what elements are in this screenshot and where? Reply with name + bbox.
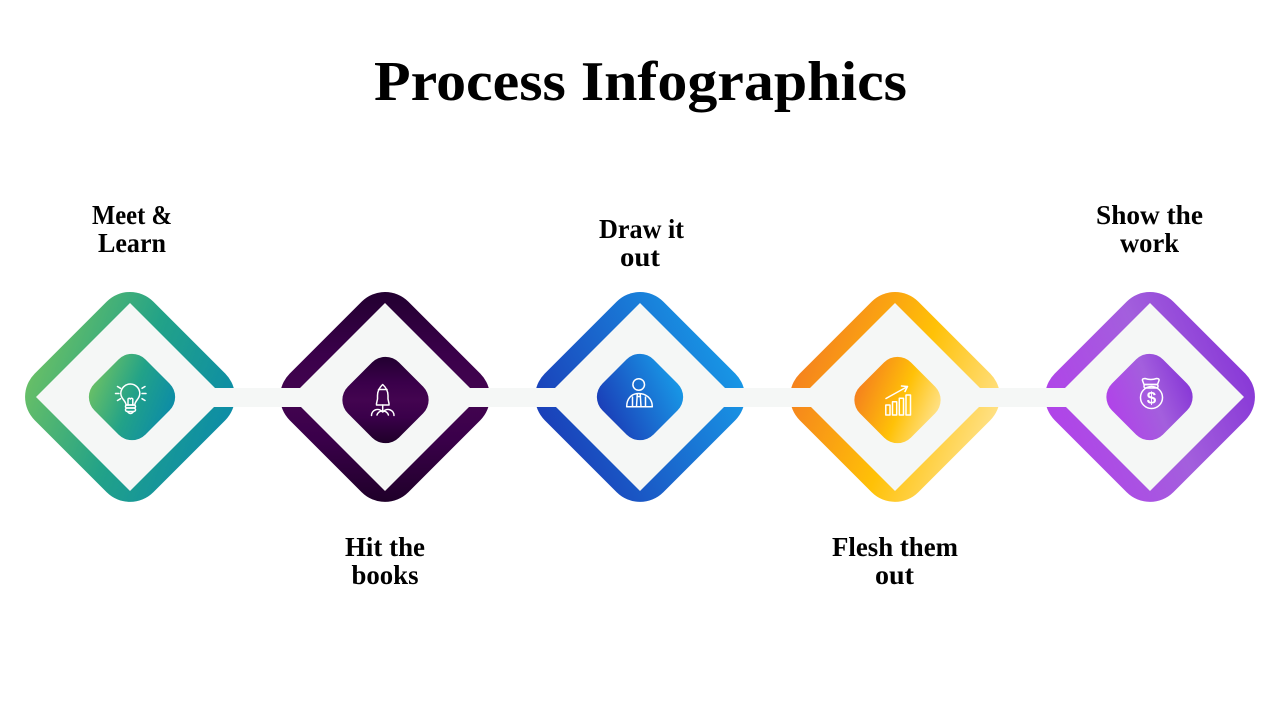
- step 2 icon badge: [342, 357, 429, 443]
- step 3 icon badge: [597, 354, 683, 440]
- step 3 inner panel: [546, 303, 734, 491]
- step 4 inner panel: [801, 303, 989, 491]
- label: step 3: out: [620, 242, 660, 272]
- step 2 inner panel: [291, 303, 479, 491]
- step 2 outer diamond: [280, 292, 490, 502]
- icon: money bag: $: [1147, 388, 1157, 408]
- icon: growth chart: [886, 386, 910, 415]
- label: step 2: [345, 532, 425, 590]
- icon: person: [627, 379, 652, 407]
- label: step 2: books: [352, 560, 418, 590]
- label: step 1: [92, 200, 172, 258]
- connector bar: [212, 388, 1068, 407]
- step 3 outer diamond: [535, 292, 745, 502]
- step 5 icon badge: [1106, 354, 1193, 440]
- step 1 outer diamond: [25, 292, 235, 502]
- step 4 icon badge: [854, 357, 941, 443]
- title: Process Infographics: [374, 51, 907, 113]
- label: step 5: work: [1120, 228, 1179, 258]
- icon: money bag: [1140, 378, 1162, 408]
- step 4 outer diamond: [790, 292, 1000, 502]
- label: step 2: Hit the: [345, 532, 425, 562]
- step 5 inner panel: [1056, 303, 1244, 491]
- label: step 4: [832, 532, 959, 590]
- label: step 5: [1096, 200, 1203, 258]
- label: step 3: [599, 214, 684, 272]
- step 1 inner panel: [36, 303, 224, 491]
- label: step 4: out: [875, 560, 914, 590]
- label: step 3: Draw it: [599, 214, 684, 244]
- label: step 4: Flesh them: [832, 532, 959, 562]
- step 5 outer diamond: [1045, 292, 1255, 502]
- icon: light bulb: [116, 384, 146, 414]
- icon: rocket: [371, 384, 394, 416]
- step 1 icon badge: [89, 354, 175, 440]
- label: step 1: Meet &: [92, 200, 172, 230]
- label: step 5: Show the: [1096, 200, 1203, 230]
- label: step 1: Learn: [98, 228, 166, 258]
